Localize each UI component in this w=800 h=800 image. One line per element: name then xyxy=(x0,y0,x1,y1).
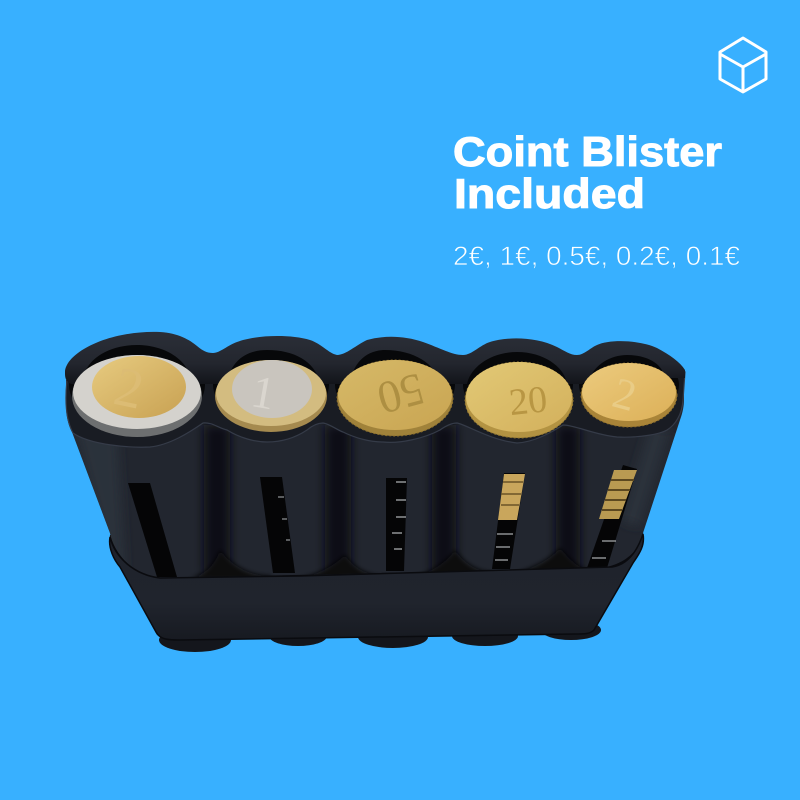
slot 3 xyxy=(386,478,407,571)
slot 2 xyxy=(260,477,295,573)
coin: 1 euro xyxy=(215,360,327,432)
coin: 2 euro: 2 xyxy=(109,355,149,422)
slot 4 xyxy=(492,473,525,569)
coin: 50 cent xyxy=(337,360,453,436)
coin: 10 cent xyxy=(581,363,677,427)
upper rim xyxy=(66,372,685,447)
coin: 1 euro: 1 xyxy=(248,365,279,419)
slot 1 xyxy=(128,483,177,577)
heading: Coint Blister xyxy=(453,128,722,175)
coin wells xyxy=(69,343,679,427)
coin: 10 cent: 2 xyxy=(608,368,642,421)
coin: 20 cent: 20 xyxy=(507,378,549,424)
tubes: upper body xyxy=(66,380,684,582)
tray: lower base xyxy=(110,534,643,640)
coin: 50 cent: 50 xyxy=(372,363,430,425)
viewing slots with springs and coins xyxy=(128,465,637,577)
coin denominations text: 2€, 1€, 0.5€, 0.2€, 0.1€ xyxy=(453,241,740,271)
icon: package cube xyxy=(720,38,766,92)
slot 5 xyxy=(587,465,637,568)
feet xyxy=(159,620,601,652)
heading xyxy=(453,128,722,217)
heading: Included xyxy=(454,170,645,217)
product: coin dispenser xyxy=(65,332,685,652)
tray back filling the groove behind the tubes xyxy=(110,532,643,586)
coin: 20 cent xyxy=(465,362,573,438)
coin: 2 euro xyxy=(72,355,202,437)
infographic canvas xyxy=(65,36,768,652)
top plate xyxy=(65,332,685,384)
